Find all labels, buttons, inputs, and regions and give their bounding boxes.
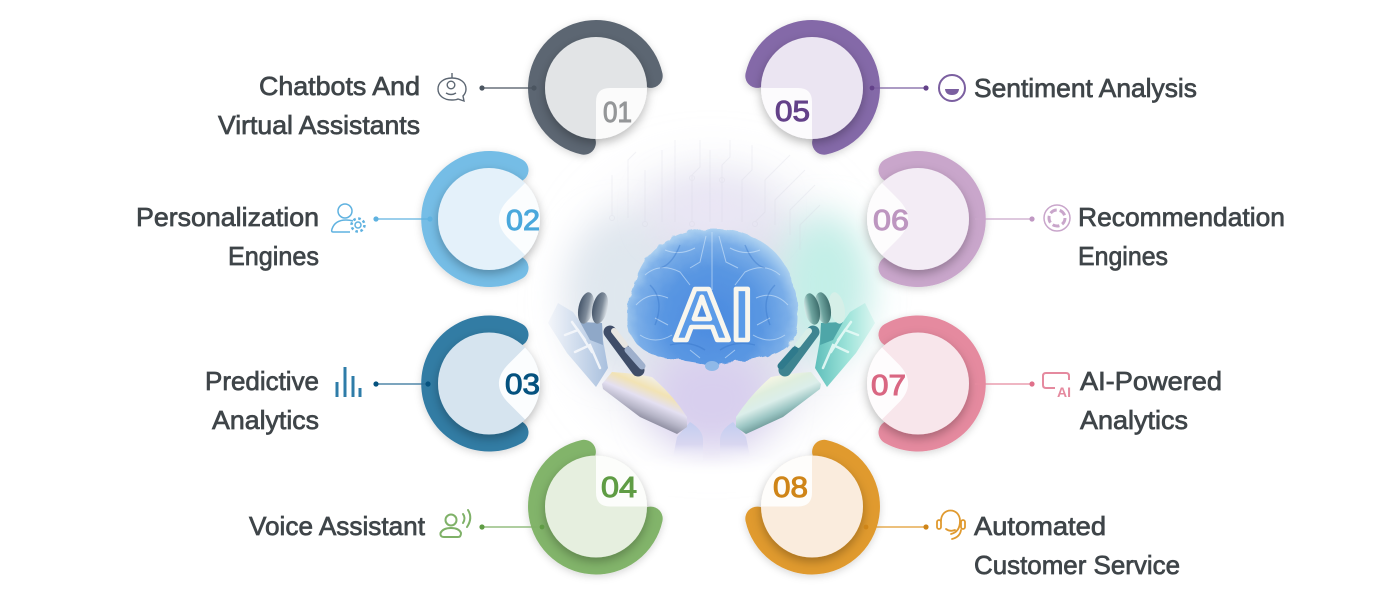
right fingers (801, 291, 848, 326)
number tile 04 (596, 456, 647, 506)
item 04: voice assistant (249, 452, 651, 562)
item 03: predictive analytics (205, 328, 540, 439)
central illustration: AI brain held by robot hands (548, 140, 875, 496)
connector 01 (479, 85, 537, 91)
number tile 06 (867, 183, 908, 255)
ring 01 (540, 32, 651, 143)
item 05: sentiment analysis (757, 32, 1197, 143)
disc 07 (867, 332, 969, 434)
label 07 (1080, 366, 1222, 435)
label 03: Predictive (205, 366, 319, 396)
ring 04 (540, 452, 651, 562)
label 07: AI-Powered (1080, 366, 1222, 396)
icon: AI screen: AI (1057, 384, 1071, 400)
disc 06 (867, 168, 969, 270)
label 03 (205, 366, 319, 435)
icon: sentiment face (939, 75, 965, 101)
item 08: automated customer service (757, 452, 1180, 580)
number tile 03 (499, 347, 540, 420)
number 02: 02 (506, 205, 540, 237)
label 01: Chatbots And (259, 71, 420, 101)
number tile 02 (499, 183, 540, 255)
ring 07 (890, 328, 974, 440)
disc 03 (438, 332, 540, 434)
number 03: 03 (505, 369, 540, 401)
label 06: Engines (1078, 241, 1168, 271)
number 07: 07 (871, 370, 906, 402)
label 08: Automated (974, 511, 1106, 541)
left robot hand (548, 291, 703, 462)
label 02: Engines (228, 241, 319, 271)
label 02 (136, 202, 319, 271)
label 02: Personalization (136, 202, 319, 232)
label 08: Customer Service (974, 550, 1180, 580)
disc 04 (545, 456, 647, 558)
disc 05 (761, 37, 863, 139)
label 07: Analytics (1080, 405, 1188, 435)
number 08: 08 (773, 472, 808, 504)
icon: AI screen (1043, 373, 1071, 400)
right thumb (781, 331, 813, 370)
icon: headset (937, 510, 965, 539)
right robot hand (720, 291, 875, 462)
connector 03 (373, 381, 431, 387)
ring 03 (433, 328, 516, 439)
connector 08 (864, 524, 929, 530)
number tile 07 (867, 347, 908, 420)
item 01: chatbots and virtual assistants (218, 32, 651, 143)
circuit traces (610, 140, 820, 250)
number tile 05 (761, 88, 812, 139)
label 05: Sentiment Analysis (974, 73, 1197, 103)
connector 04 (479, 524, 544, 530)
ring 02 (433, 163, 516, 275)
connector 06 (975, 216, 1035, 222)
ring 08 (757, 452, 868, 562)
number 04: 04 (601, 472, 637, 504)
ring 05 (757, 32, 868, 143)
icon: chatbot (438, 73, 466, 101)
label 06: Recommendation (1078, 202, 1285, 232)
item 06: recommendation engines (867, 163, 1285, 275)
icon: recommendation ring (1044, 205, 1070, 231)
connector 02 (373, 216, 433, 222)
brain (628, 228, 798, 371)
connector 07 (975, 381, 1035, 387)
connector 05 (870, 85, 929, 91)
number 01: 01 (603, 97, 632, 129)
number tile 08 (761, 456, 812, 506)
number tile 01 (596, 88, 647, 139)
left fingers (575, 291, 611, 325)
ring 06 (890, 163, 974, 275)
number 06: 06 (873, 205, 909, 237)
icon: person with gear (332, 204, 364, 232)
label 01: Virtual Assistants (218, 110, 420, 140)
label 03: Analytics (212, 405, 319, 435)
left thumb (610, 331, 642, 370)
brain AI lettering: AI (673, 273, 753, 356)
label 01 (218, 71, 420, 140)
icon: voice assistant (440, 510, 470, 537)
disc 01 (545, 37, 647, 139)
disc 08 (761, 456, 863, 558)
number 05: 05 (775, 96, 810, 128)
icon: bar chart (337, 367, 360, 397)
label 06 (1078, 202, 1285, 271)
disc 02 (438, 168, 540, 270)
label 04: Voice Assistant (249, 511, 426, 541)
item 02: personalization engines (136, 163, 540, 275)
item 07: AI-powered analytics (867, 328, 1222, 440)
background glow (570, 180, 870, 496)
label 08 (974, 511, 1180, 580)
